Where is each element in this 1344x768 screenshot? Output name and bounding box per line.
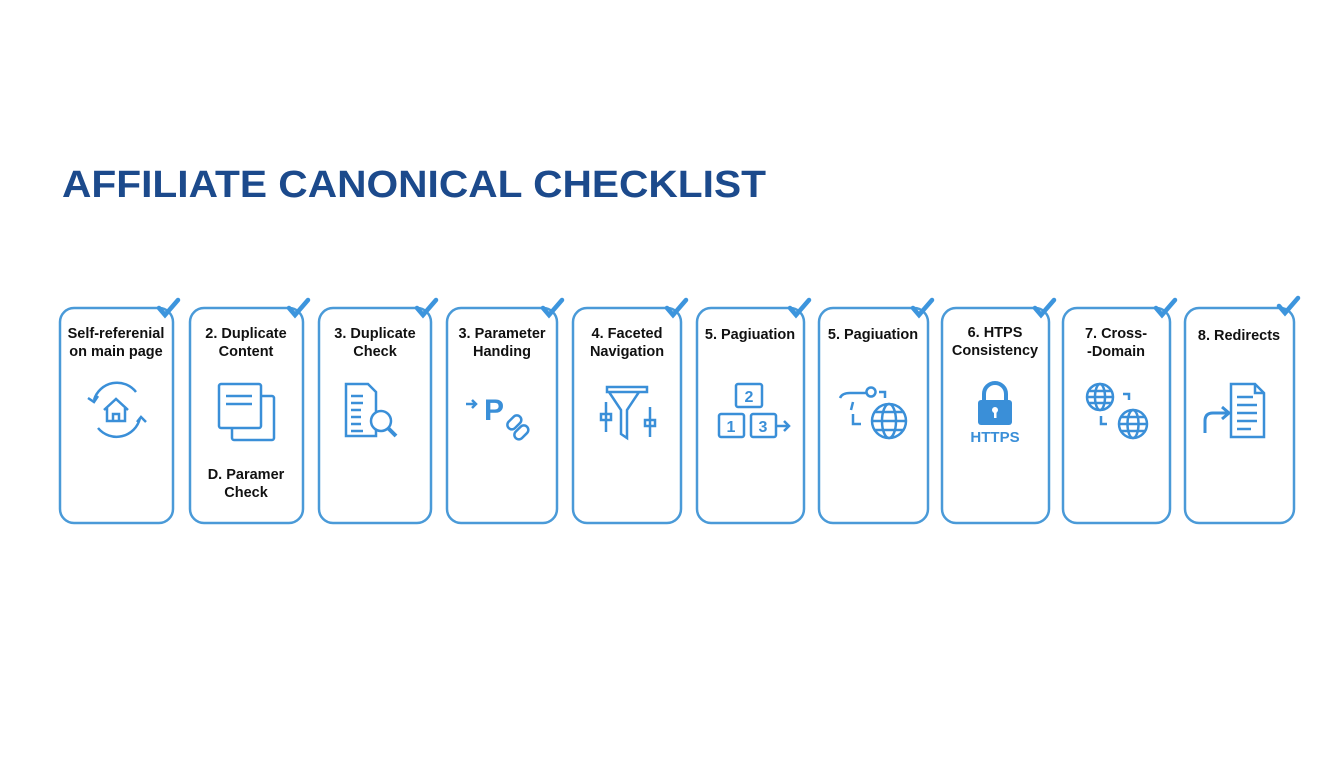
icon: P link: P	[484, 394, 504, 427]
card 2: duplicate content: D. Paramer	[208, 467, 285, 483]
card 6: pagination	[697, 300, 809, 523]
icon: globe with path	[840, 388, 906, 438]
icon: pages 1 2 3: 3	[759, 419, 768, 436]
icon: documents	[219, 384, 274, 440]
card 7: pagination globe	[819, 300, 932, 523]
title: AFFILIATE CANONICAL CHECKLIST	[62, 164, 766, 206]
icon: funnel sliders	[601, 387, 655, 438]
card 9: cross-domain: -Domain	[1087, 344, 1145, 360]
card 1: self-referential	[60, 300, 178, 523]
card 9: cross-domain	[1063, 300, 1175, 523]
card 9: cross-domain: 7. Cross-	[1085, 326, 1147, 342]
card 6: pagination: 5. Pagiuation	[705, 327, 795, 343]
icon: document search	[346, 384, 396, 436]
icon: padlock HTTPS	[970, 383, 1020, 446]
card 10: redirects	[1185, 298, 1298, 523]
card 2: duplicate content	[190, 300, 308, 523]
icon: home cycle	[88, 383, 146, 437]
card 1: self-referential: Self-referenial	[68, 326, 164, 342]
icon: pages 1 2 3: 1	[727, 419, 736, 436]
card 2: duplicate content: Content	[219, 344, 274, 360]
icon: redirect document	[1205, 384, 1264, 437]
card 5: faceted navigation: Navigation	[590, 344, 664, 360]
icon: padlock HTTPS: HTTPS	[970, 429, 1020, 446]
card 1: self-referential: on main page	[69, 344, 163, 360]
icon: P link	[466, 394, 530, 441]
card 10: redirects: 8. Redirects	[1198, 328, 1280, 344]
card 3: duplicate check	[319, 300, 436, 523]
icon: pages 1 2 3: 2	[745, 389, 754, 406]
icon: two globes	[1087, 384, 1147, 438]
card 8: HTTPS: Consistency	[952, 343, 1038, 359]
card 2: duplicate content: 2. Duplicate	[205, 326, 287, 342]
card 2: duplicate content: Check	[224, 485, 269, 501]
card 3: duplicate check: Check	[353, 344, 398, 360]
icon: pages 1 2 3	[719, 384, 789, 437]
card 4: parameter handling: 3. Parameter	[458, 326, 546, 342]
card 4: parameter handling	[447, 300, 562, 523]
card 8: HTTPS	[942, 300, 1054, 523]
card 5: faceted navigation	[573, 300, 686, 523]
card 7: pagination globe: 5. Pagiuation	[828, 327, 918, 343]
card 8: HTTPS: 6. HTPS	[968, 325, 1023, 341]
card 5: faceted navigation: 4. Faceted	[592, 326, 662, 342]
card 4: parameter handling: Handing	[473, 344, 531, 360]
card 3: duplicate check: 3. Duplicate	[334, 326, 416, 342]
